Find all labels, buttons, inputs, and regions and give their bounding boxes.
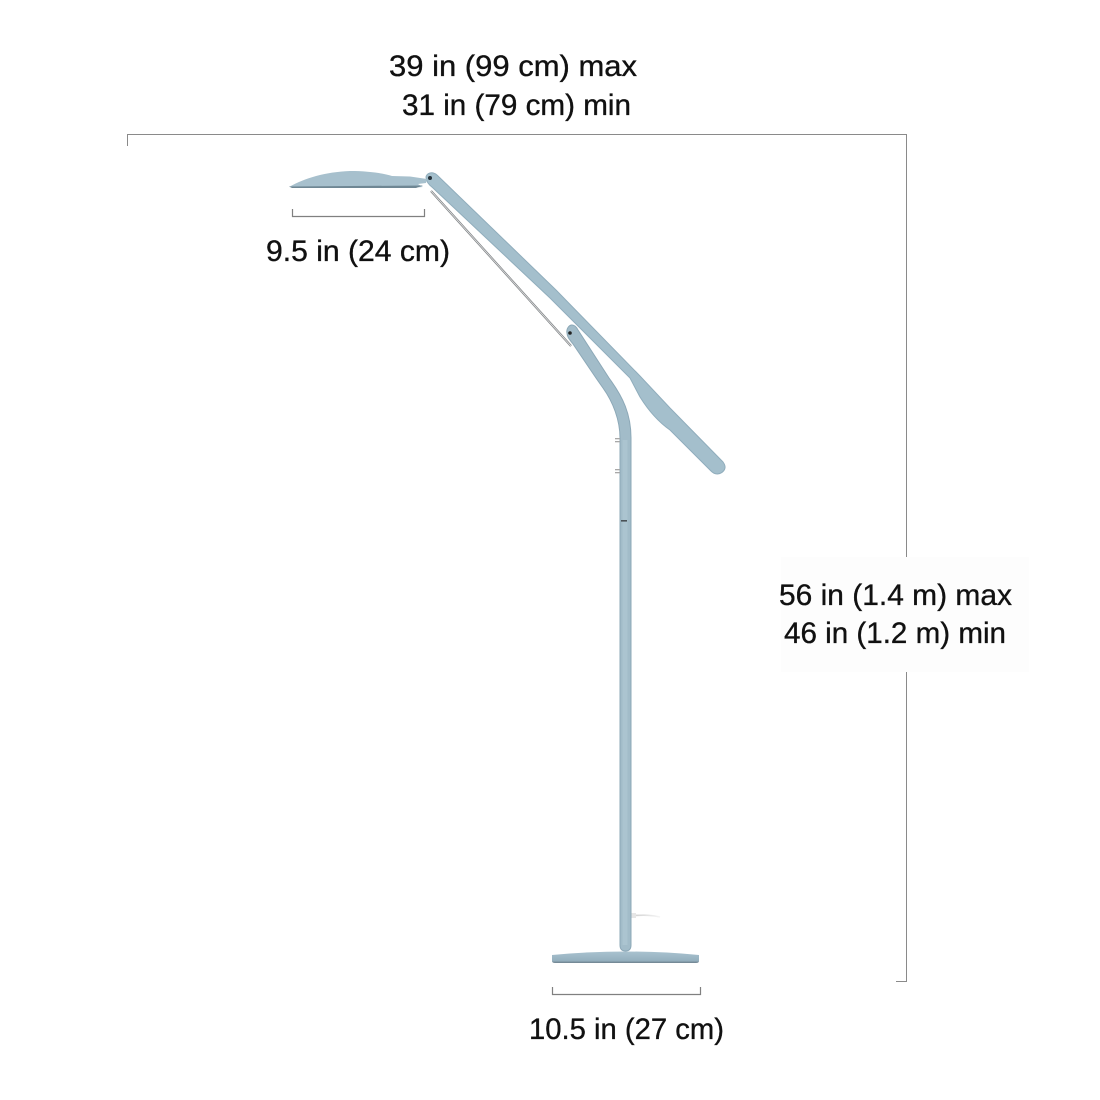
- width label: 31 in (79 cm) min: [402, 89, 631, 122]
- shade width label: 9.5 in (24 cm): [266, 235, 450, 268]
- pole adjustment marks: [615, 438, 627, 522]
- shade width bracket: [292, 209, 424, 216]
- height label: 56 in (1.4 m) max: [779, 579, 1012, 612]
- height label: [779, 557, 1029, 672]
- height dimension line: [896, 134, 906, 982]
- upper arm with handle: [426, 173, 725, 474]
- base width bracket: [552, 987, 700, 994]
- lamp: [289, 171, 725, 963]
- pole highlight: [622, 440, 628, 945]
- height label: 46 in (1.2 m) min: [784, 617, 1006, 650]
- linkage rod: [431, 191, 571, 346]
- base width label: 10.5 in (27 cm): [529, 1013, 724, 1046]
- lamp shade: [289, 171, 427, 188]
- width dimension line: [128, 134, 906, 146]
- lower pivot: [568, 331, 572, 335]
- width label: [389, 50, 637, 122]
- width label: 39 in (99 cm) max: [389, 50, 637, 83]
- upper pivot: [428, 176, 432, 180]
- cable: [631, 913, 660, 918]
- base: [552, 952, 699, 963]
- pole and lower arm: [567, 325, 631, 951]
